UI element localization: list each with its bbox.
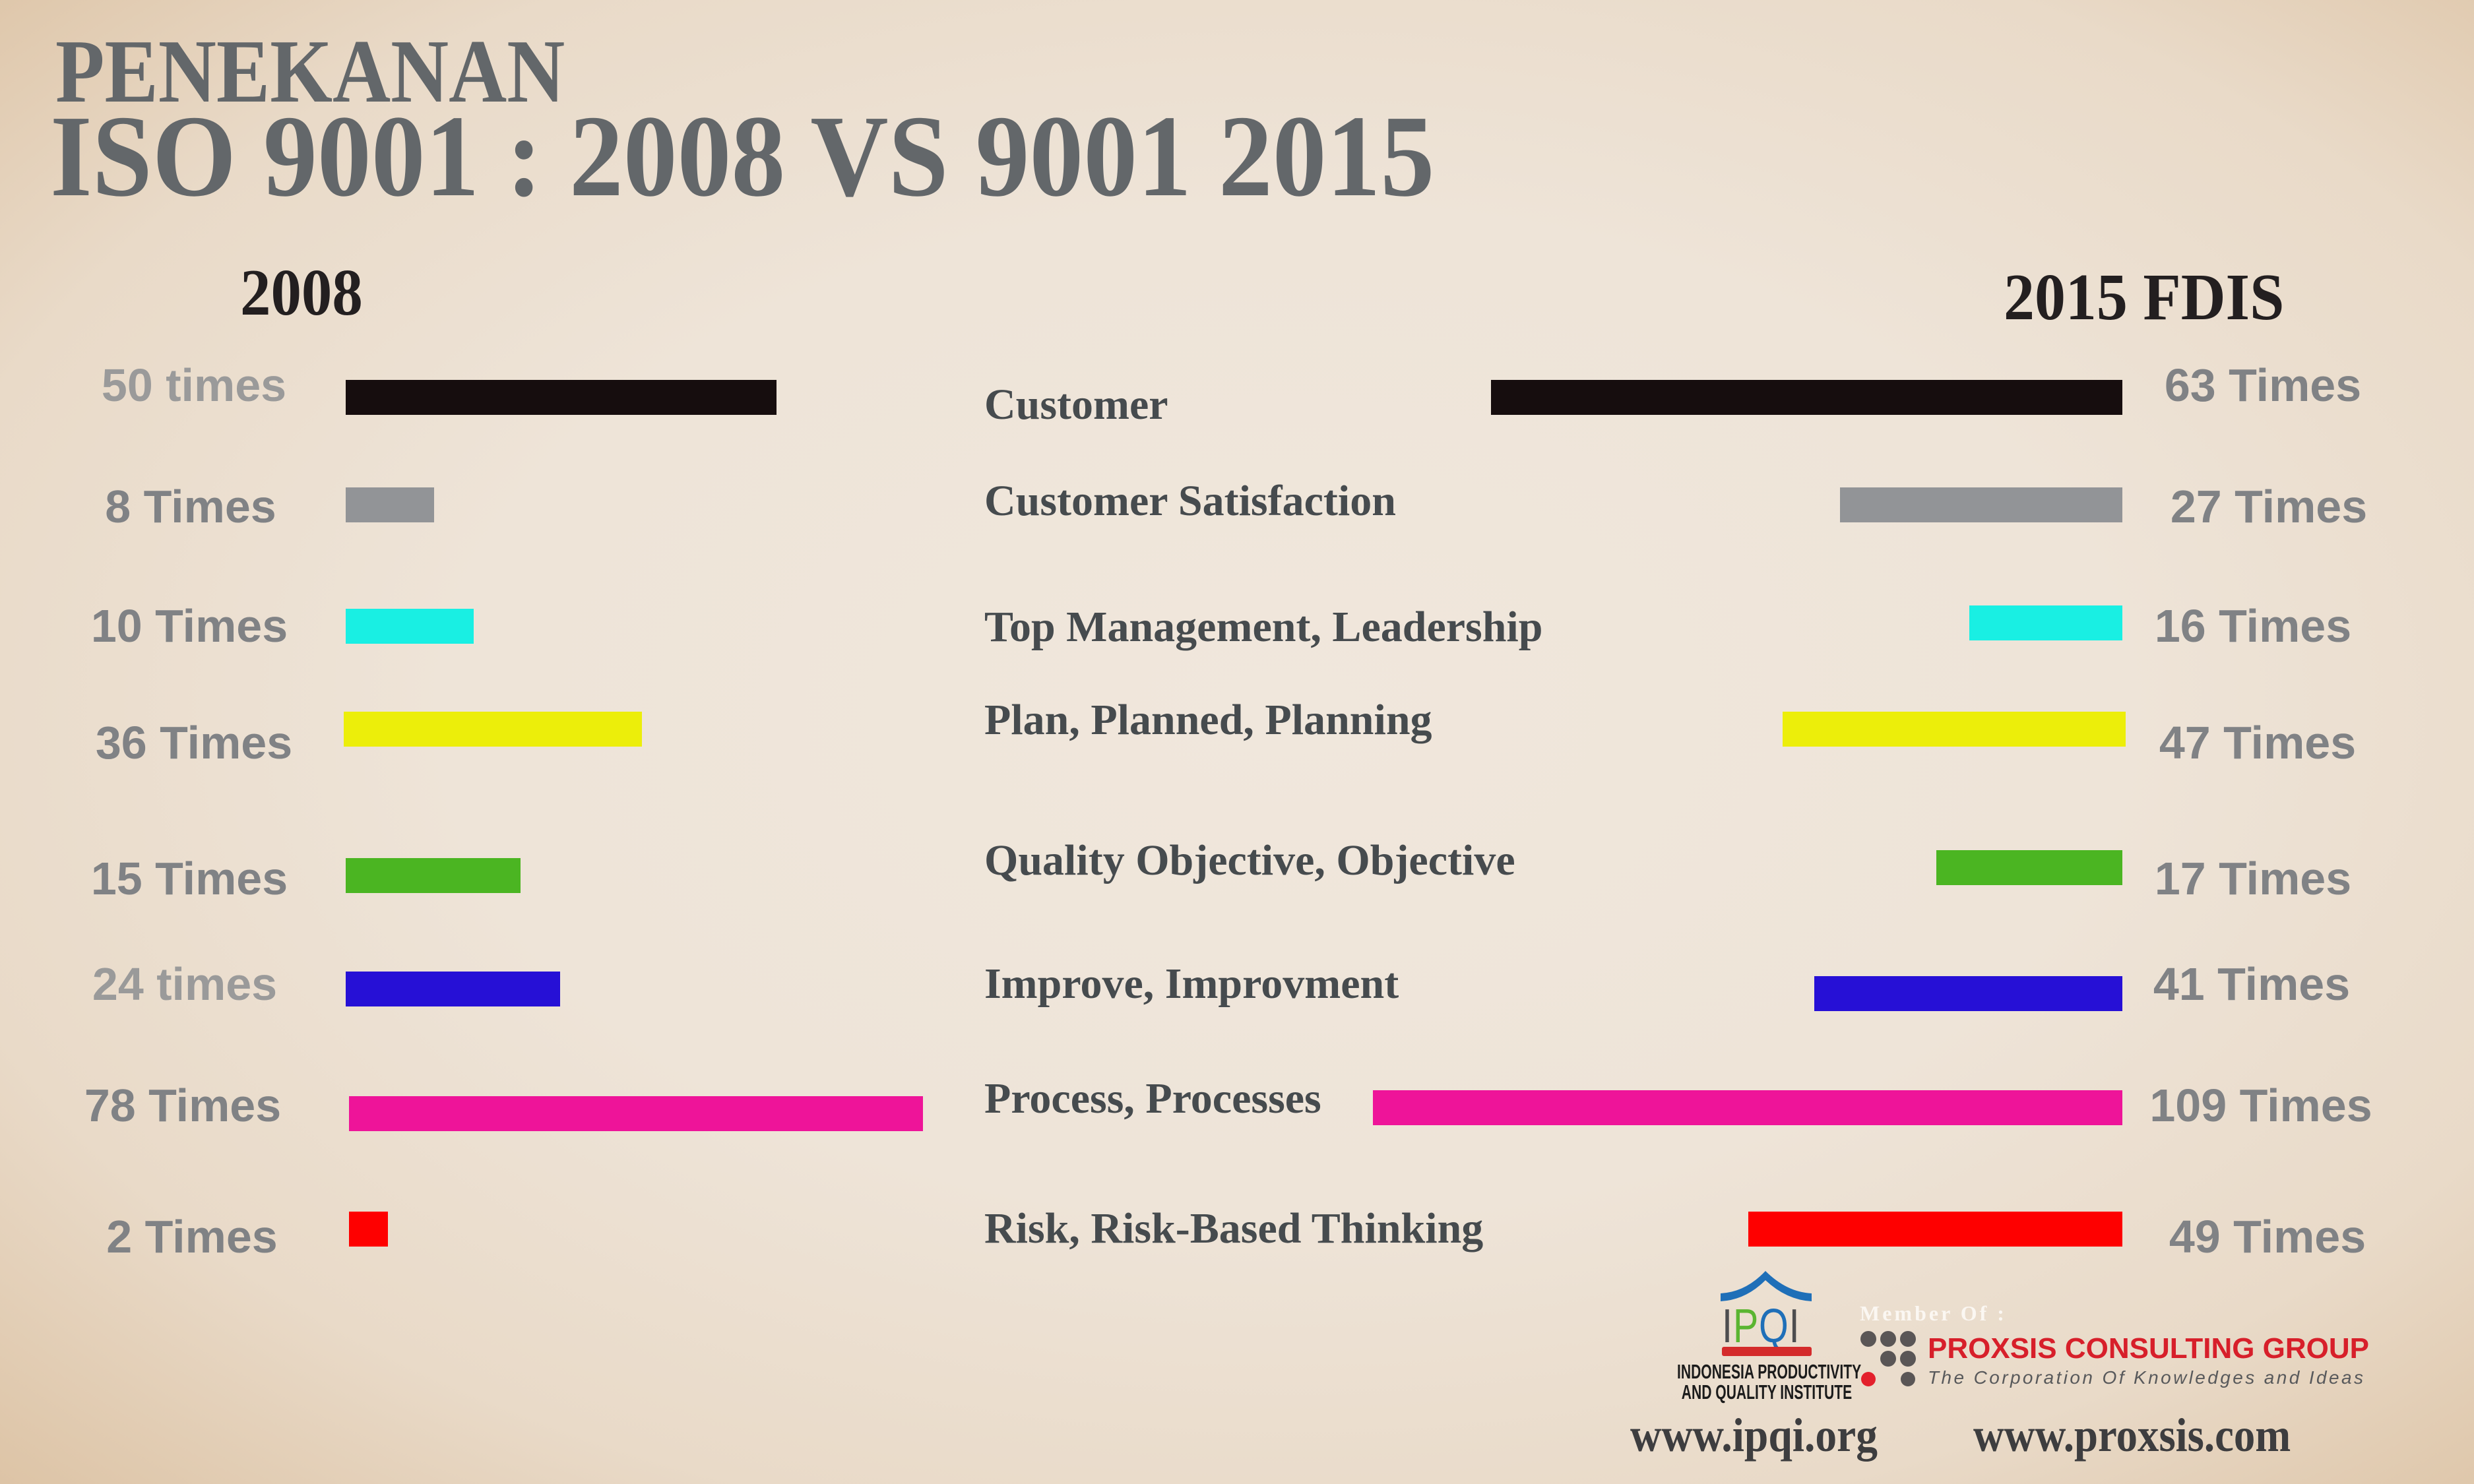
text: www.ipqi.org: www.ipqi.org xyxy=(1630,1409,1878,1462)
label: Process, Processes xyxy=(984,1074,1321,1123)
bar 2015 xyxy=(1840,487,2122,522)
row: Plan, Planned, Planning xyxy=(96,696,2356,768)
bar 2008 xyxy=(346,487,434,522)
row: Improve, Improvment xyxy=(92,958,2350,1011)
title: ISO 9001 : 2008 VS 9001 2015: ISO 9001 : 2008 VS 9001 2015 xyxy=(50,92,1434,221)
label: Top Management, Leadership xyxy=(984,603,1542,651)
bar 2015 xyxy=(1814,976,2122,1011)
bar 2008 xyxy=(349,1096,923,1131)
count 2015: 17 Times xyxy=(2155,853,2351,904)
text: tagline: The Corporation Of Knowledges and Ideas xyxy=(1928,1367,2365,1388)
label: Customer Satisfaction xyxy=(984,477,1396,525)
text: institute name: INDONESIA PRODUCTIVITY xyxy=(1677,1360,1861,1383)
count 2015: 16 Times xyxy=(2155,600,2351,652)
icon: proxsis dots xyxy=(1860,1331,1916,1386)
bar 2015 xyxy=(1936,850,2122,885)
row: Customer xyxy=(102,359,2361,429)
count 2015: 27 Times xyxy=(2171,481,2367,532)
row: Quality Objective, Objective xyxy=(91,836,2351,904)
bar 2015 xyxy=(1783,712,2126,747)
label: Improve, Improvment xyxy=(984,960,1399,1008)
count 2008: 24 times xyxy=(92,958,277,1010)
row: Top Management, Leadership xyxy=(91,600,2351,652)
column heading: 2015 FDIS: 2015 FDIS xyxy=(2004,260,2284,334)
title: PENEKANAN: PENEKANAN xyxy=(55,21,565,121)
bar 2008 xyxy=(346,609,474,644)
text: Member Of: Member Of : xyxy=(1860,1301,2007,1325)
bar 2015 xyxy=(1748,1212,2122,1247)
text: www.proxsis.com: www.proxsis.com xyxy=(1973,1409,2291,1462)
bar 2008 xyxy=(346,380,777,415)
row: Risk, Risk-Based Thinking xyxy=(106,1204,2366,1262)
count 2008: 8 Times xyxy=(105,481,276,532)
bar 2008 xyxy=(346,858,521,893)
bar 2015 xyxy=(1373,1090,2122,1125)
bar 2008 xyxy=(349,1212,388,1247)
row: Customer Satisfaction xyxy=(105,477,2367,532)
count 2015: 47 Times xyxy=(2159,717,2356,768)
count 2008: 2 Times xyxy=(106,1211,278,1262)
bar 2015 xyxy=(1969,605,2122,640)
row: Process, Processes xyxy=(84,1074,2372,1131)
text: institute name: AND QUALITY INSTITUTE xyxy=(1682,1380,1852,1404)
count 2008: 10 Times xyxy=(91,600,288,652)
count 2015: 49 Times xyxy=(2169,1211,2366,1262)
text: IPQI letters: IPQI xyxy=(1722,1300,1800,1353)
logo: IPQI xyxy=(1677,1271,1861,1404)
count 2008: 15 Times xyxy=(91,853,288,904)
column heading: 2008: 2008 xyxy=(240,255,363,329)
bar 2008 xyxy=(346,972,560,1006)
label: Customer xyxy=(984,381,1168,429)
label: Quality Objective, Objective xyxy=(984,836,1515,884)
bar 2008 xyxy=(344,712,642,747)
count 2015: 41 Times xyxy=(2153,958,2350,1010)
label: Risk, Risk-Based Thinking xyxy=(984,1204,1483,1252)
count 2008: 36 Times xyxy=(96,717,292,768)
red bar xyxy=(1722,1347,1812,1356)
count 2015: 109 Times xyxy=(2149,1080,2372,1131)
count 2015: 63 Times: 63 Times xyxy=(2165,359,2361,411)
icon: roof xyxy=(1721,1271,1812,1301)
bar 2015 xyxy=(1491,380,2122,415)
count 2008: 50 times: 50 times xyxy=(102,359,286,411)
text: PROXSIS CONSULTING GROUP: PROXSIS CONSULTING GROUP xyxy=(1928,1332,2369,1365)
label: Plan, Planned, Planning xyxy=(984,696,1432,744)
text: institute name xyxy=(1677,1360,1861,1404)
count 2008: 78 Times xyxy=(84,1080,281,1131)
